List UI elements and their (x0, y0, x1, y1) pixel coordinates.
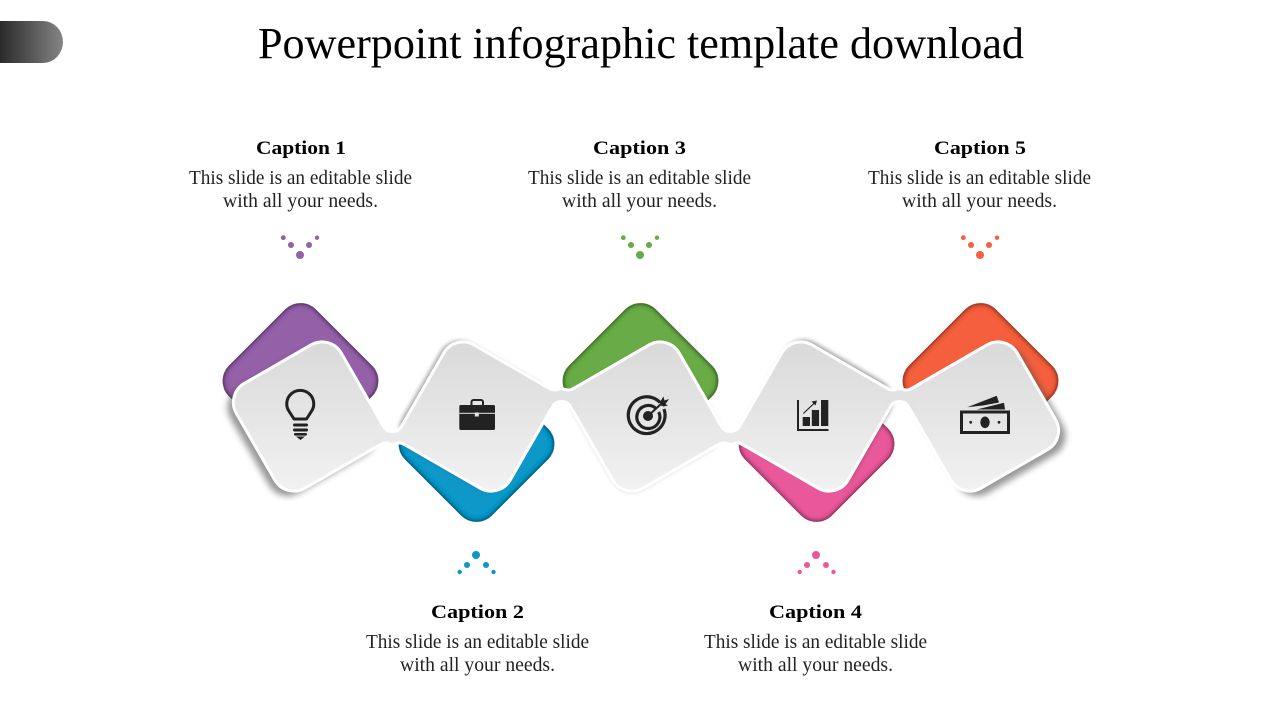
caption 3 text (528, 138, 751, 212)
connector: tiles 1 and 2 (372, 420, 414, 450)
tile 2 with briefcase (391, 333, 560, 499)
connector: tiles 3 and 4 (710, 420, 752, 450)
icon: bar chart (798, 400, 828, 430)
caption 2 text: with all your needs. (400, 654, 555, 676)
dots: purple (281, 235, 319, 259)
dots: blue (458, 551, 496, 574)
caption 5 text: with all your needs. (902, 190, 1057, 212)
tile 5 with banknotes (901, 334, 1074, 504)
title: Powerpoint infographic template download (258, 19, 1024, 68)
dots: pink (798, 551, 836, 574)
caption 3 text: Caption 3 (593, 138, 686, 159)
diamond: purple (214, 294, 387, 468)
caption 5 text (868, 138, 1091, 212)
tile 3 with target (563, 334, 729, 500)
tile 4 with bar chart (732, 332, 901, 499)
connector: tiles 2 and 3 (540, 384, 582, 414)
icon: lightbulb (287, 390, 314, 440)
caption 2 text: Caption 2 (431, 602, 524, 623)
caption 4 text (704, 602, 927, 676)
caption 5 text: This slide is an editable slide (868, 167, 1091, 189)
caption 3 text: with all your needs. (562, 190, 717, 212)
diamond: pink (730, 357, 903, 531)
caption 1 text: with all your needs. (223, 190, 378, 212)
icon: target (628, 396, 669, 434)
diamond: blue (390, 357, 563, 531)
dots: green (621, 235, 659, 259)
icon: briefcase (459, 400, 495, 430)
diamond: orange (894, 294, 1067, 468)
caption 2 text: This slide is an editable slide (366, 631, 589, 653)
caption 4 text: This slide is an editable slide (704, 631, 927, 653)
connector: tiles 4 and 5 (878, 384, 920, 414)
caption 4 text: Caption 4 (769, 602, 863, 623)
caption 1 text: This slide is an editable slide (189, 167, 412, 189)
caption 1 text (189, 138, 412, 212)
decorative gradient tab (0, 21, 63, 63)
tile 1 with lightbulb (219, 334, 391, 504)
caption 3 text: This slide is an editable slide (528, 167, 751, 189)
caption 4 text: with all your needs. (738, 654, 893, 676)
caption 2 text (366, 602, 589, 676)
caption 5 text: Caption 5 (934, 138, 1026, 159)
diamond: green (554, 294, 727, 468)
caption 1 text: Caption 1 (256, 138, 346, 159)
dots: orange (961, 235, 999, 259)
icon: banknotes (962, 396, 1008, 432)
